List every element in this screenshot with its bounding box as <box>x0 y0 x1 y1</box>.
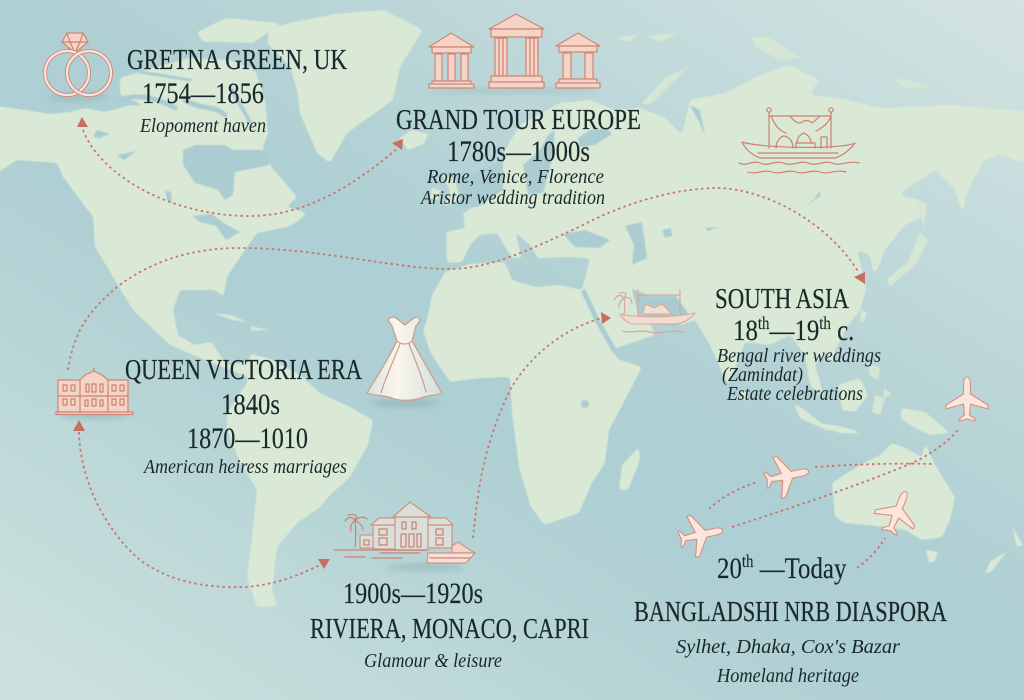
Caspian Sea <box>625 222 647 265</box>
route: Alaska to Iceland arc <box>77 117 403 216</box>
text block: Grand Tour Europe <box>396 105 641 209</box>
temple: center <box>489 14 544 88</box>
text block: South Asia: SOUTH ASIA <box>715 284 850 315</box>
text block: Bangladeshi diaspora: Homeland heritage <box>716 666 859 687</box>
text block: Queen Victoria Era: 1870—1010 <box>187 422 308 455</box>
icon: three classical temples <box>429 14 600 94</box>
text block: Bangladeshi diaspora: Sylhet, Dhaka, Cox's Bazar <box>676 637 900 658</box>
route: Palace to Riviera arc <box>73 420 330 587</box>
text block: Grand Tour Europe: Aristor wedding tradition <box>419 188 605 209</box>
South America <box>227 354 373 607</box>
text block: Grand Tour Europe: GRAND TOUR EUROPE <box>396 105 641 136</box>
Madagascar <box>619 447 640 490</box>
temple: right <box>556 33 600 88</box>
text block: South Asia: 18 <box>733 313 758 347</box>
text block: South Asia: (Zamindat) <box>722 365 803 386</box>
text block: Gretna Green: GRETNA GREEN, UK <box>127 45 347 76</box>
icon: wedding dress <box>367 317 442 407</box>
route: diaspora dotted lines <box>709 428 960 568</box>
icon: bridal barge <box>739 108 859 173</box>
North America <box>0 105 307 378</box>
arrowhead: East Asia <box>854 272 865 284</box>
text block: Grand Tour Europe: 1780s—1000s <box>447 135 590 168</box>
New Zealand <box>985 527 1023 574</box>
icon: plane over Australia <box>870 484 925 540</box>
icon: plane lower left <box>675 510 727 560</box>
arrowhead: Gretna <box>77 117 88 127</box>
icon: Riviera villa and yacht <box>334 502 475 571</box>
route: Palace to East Asia arc <box>68 188 865 370</box>
text block: Bangladeshi diaspora: 20 <box>717 551 742 585</box>
Iceland <box>400 130 428 150</box>
Arctic Canada <box>120 58 268 148</box>
Australia <box>832 443 955 540</box>
icon: wedding rings <box>45 33 111 102</box>
text block: Riviera: RIVIERA, MONACO, CAPRI <box>310 614 589 645</box>
text block: Queen Victoria Era: 1840s <box>221 388 280 421</box>
temple: left <box>429 33 474 88</box>
Greenland <box>267 10 423 163</box>
text block: Grand Tour Europe: Rome, Venice, Florence <box>426 167 604 188</box>
Hudson Bay <box>183 145 270 200</box>
text block: Queen Victoria Era: QUEEN VICTORIA ERA <box>125 355 363 386</box>
inland seas <box>93 72 820 408</box>
Caribbean <box>213 313 270 331</box>
text block: Queen Victoria Era: American heiress marriages <box>142 457 347 478</box>
North Sea <box>458 160 503 207</box>
text block: South Asia: Estate celebrations <box>726 384 863 405</box>
Sri Lanka <box>741 391 747 401</box>
icon: palace <box>56 368 133 419</box>
text block: Riviera: Glamour & leisure <box>364 651 502 672</box>
text block: Gretna Green <box>127 45 347 137</box>
text block: South Asia: th <box>819 313 832 333</box>
text block: Bangladeshi diaspora: —Today <box>753 551 847 585</box>
Lake Victoria <box>581 400 589 408</box>
icon: plane centre <box>761 451 813 501</box>
text block: South Asia: c. <box>831 313 854 347</box>
Red Sea <box>583 290 614 350</box>
route: Riviera to Arabian Sea arc <box>473 312 611 538</box>
inland lakes <box>662 190 820 238</box>
arrowhead: Palace <box>73 420 85 431</box>
Ellesmere <box>197 18 280 43</box>
Baltic and White Sea <box>523 105 705 195</box>
arrowhead: boat <box>601 312 611 324</box>
Eurasia <box>446 65 1024 400</box>
Tasmania <box>926 550 938 562</box>
North American lakes <box>93 130 240 240</box>
text block: Gretna Green: Elopoment haven <box>139 116 266 137</box>
text block: South Asia: th <box>758 313 770 333</box>
Sumatra and Java <box>793 403 866 434</box>
text block: Riviera <box>310 577 589 672</box>
Persian Gulf <box>640 298 665 316</box>
icon: plane top right <box>946 377 988 421</box>
Arctic islands <box>615 33 930 105</box>
text block: South Asia <box>715 284 881 405</box>
Japan <box>887 200 928 287</box>
text block: Queen Victoria Era <box>125 355 363 478</box>
arrowhead: Riviera <box>318 559 330 569</box>
text block: South Asia: Bengal river weddings <box>717 346 881 367</box>
icon: river boat with palm <box>614 289 695 333</box>
text block: Gretna Green: 1754—1856 <box>142 77 264 110</box>
Sulawesi <box>872 395 885 415</box>
Arctic channels <box>120 97 175 108</box>
Black Sea <box>563 230 610 248</box>
text block: South Asia: —19 <box>769 313 819 347</box>
British Isles <box>430 175 460 206</box>
Africa <box>423 262 642 525</box>
Philippines and Taiwan <box>860 310 892 398</box>
text block: Bangladeshi diaspora: th <box>742 551 754 571</box>
text block: Riviera: 1900s—1920s <box>343 577 483 610</box>
text block: Bangladeshi diaspora: BANGLADSHI NRB DIASPORA <box>634 597 948 628</box>
arrowhead: Grand Tour <box>392 139 403 150</box>
islands <box>213 33 1023 574</box>
New Guinea and Borneo <box>838 378 950 435</box>
text block: Bangladeshi diaspora <box>634 551 948 687</box>
